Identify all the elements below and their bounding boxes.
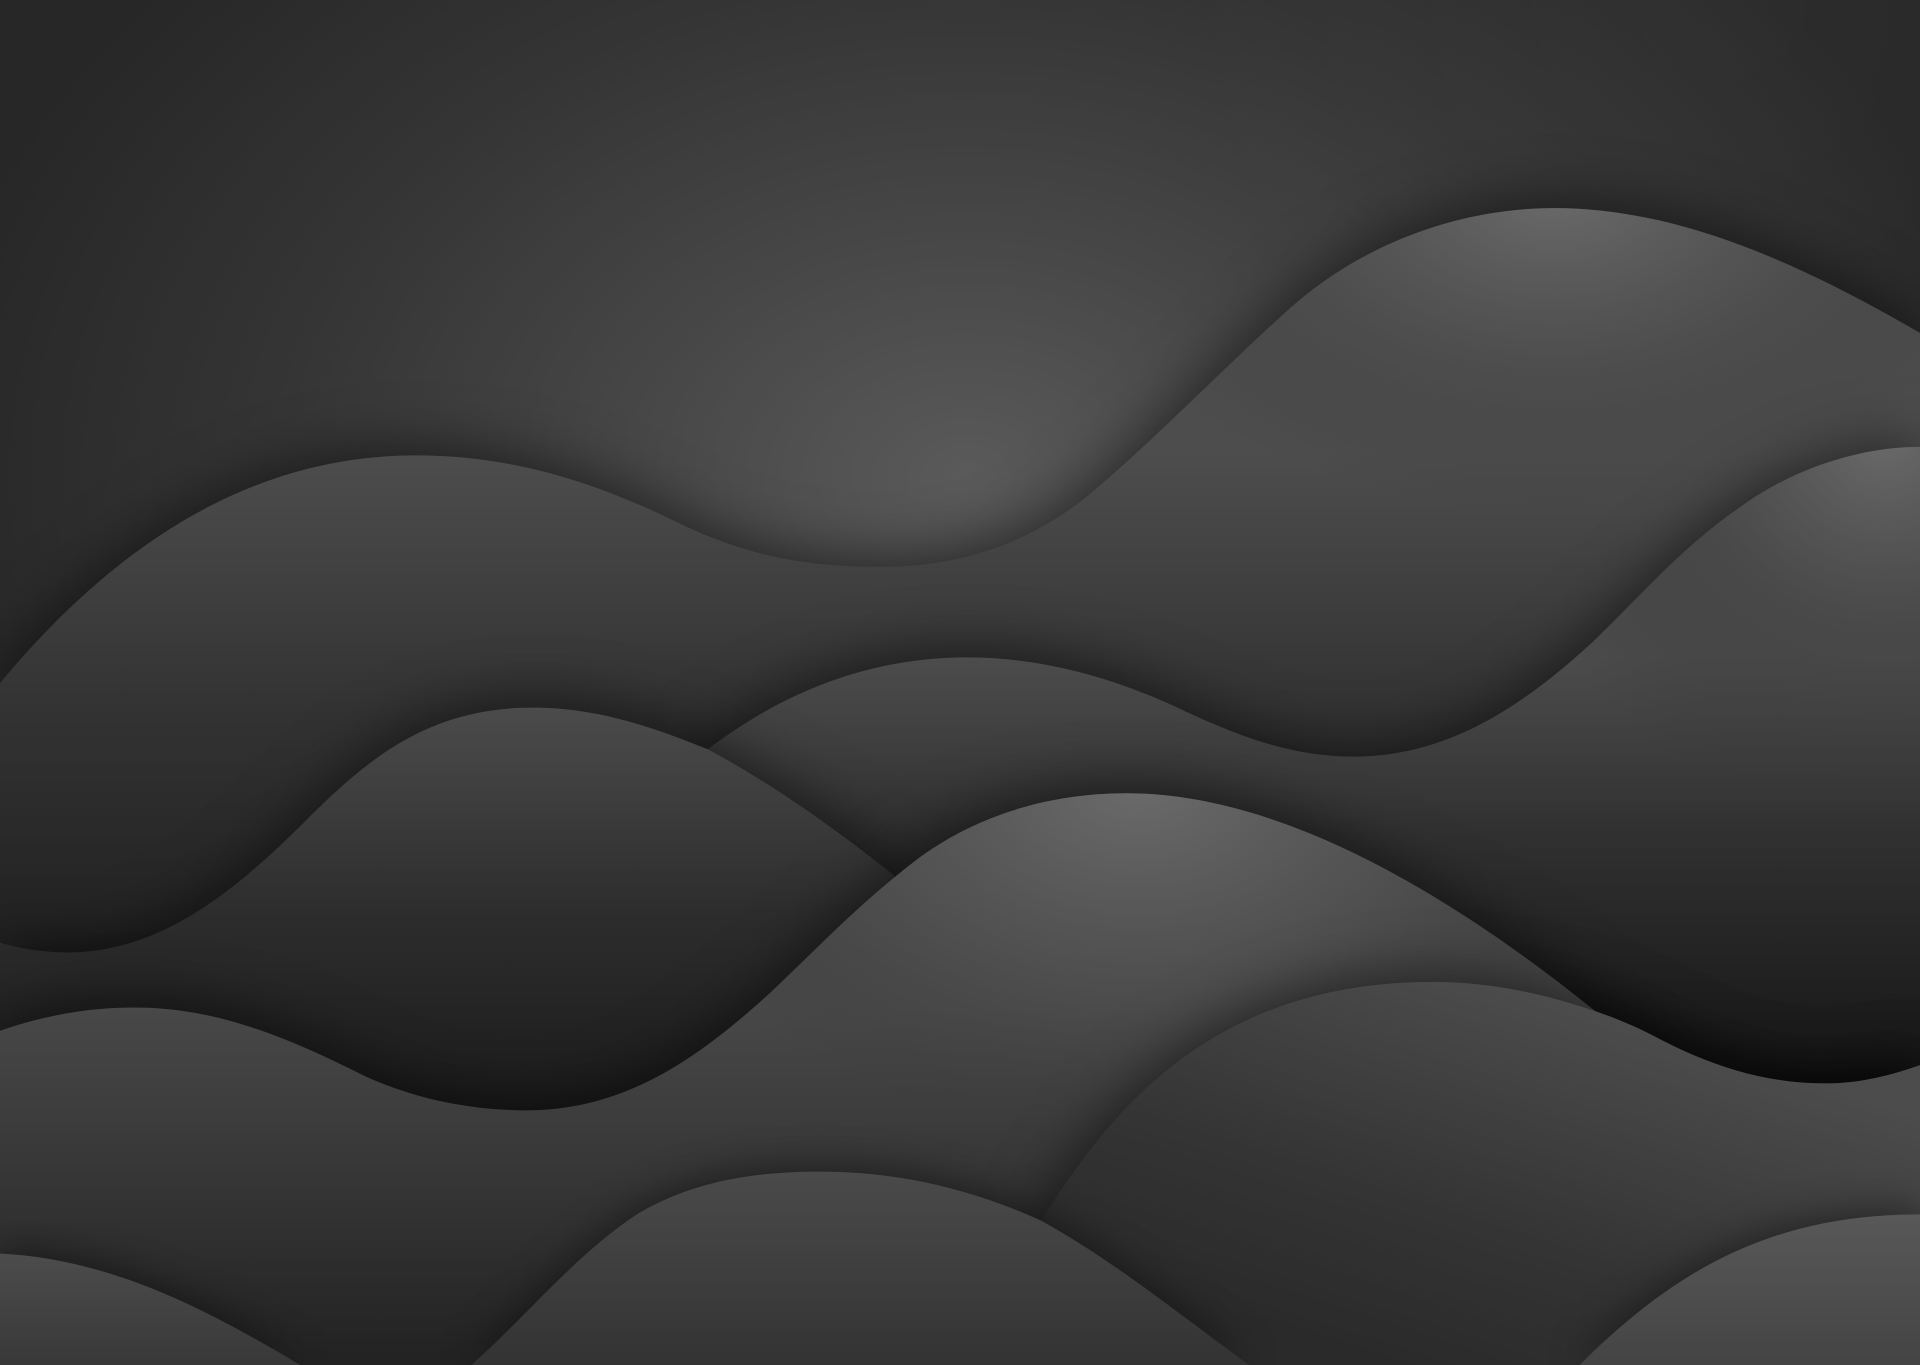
wave: bottom right corner layer [1580, 1214, 1920, 1365]
wave: bottom center layer [471, 1172, 1249, 1365]
wave: lower right layer [1041, 982, 1920, 1365]
wave: right middle layer [708, 447, 1920, 1365]
wave: left hump layer [0, 708, 980, 1365]
wave: bottom left corner layer [0, 1254, 300, 1365]
wave: central long layer [0, 793, 1920, 1365]
